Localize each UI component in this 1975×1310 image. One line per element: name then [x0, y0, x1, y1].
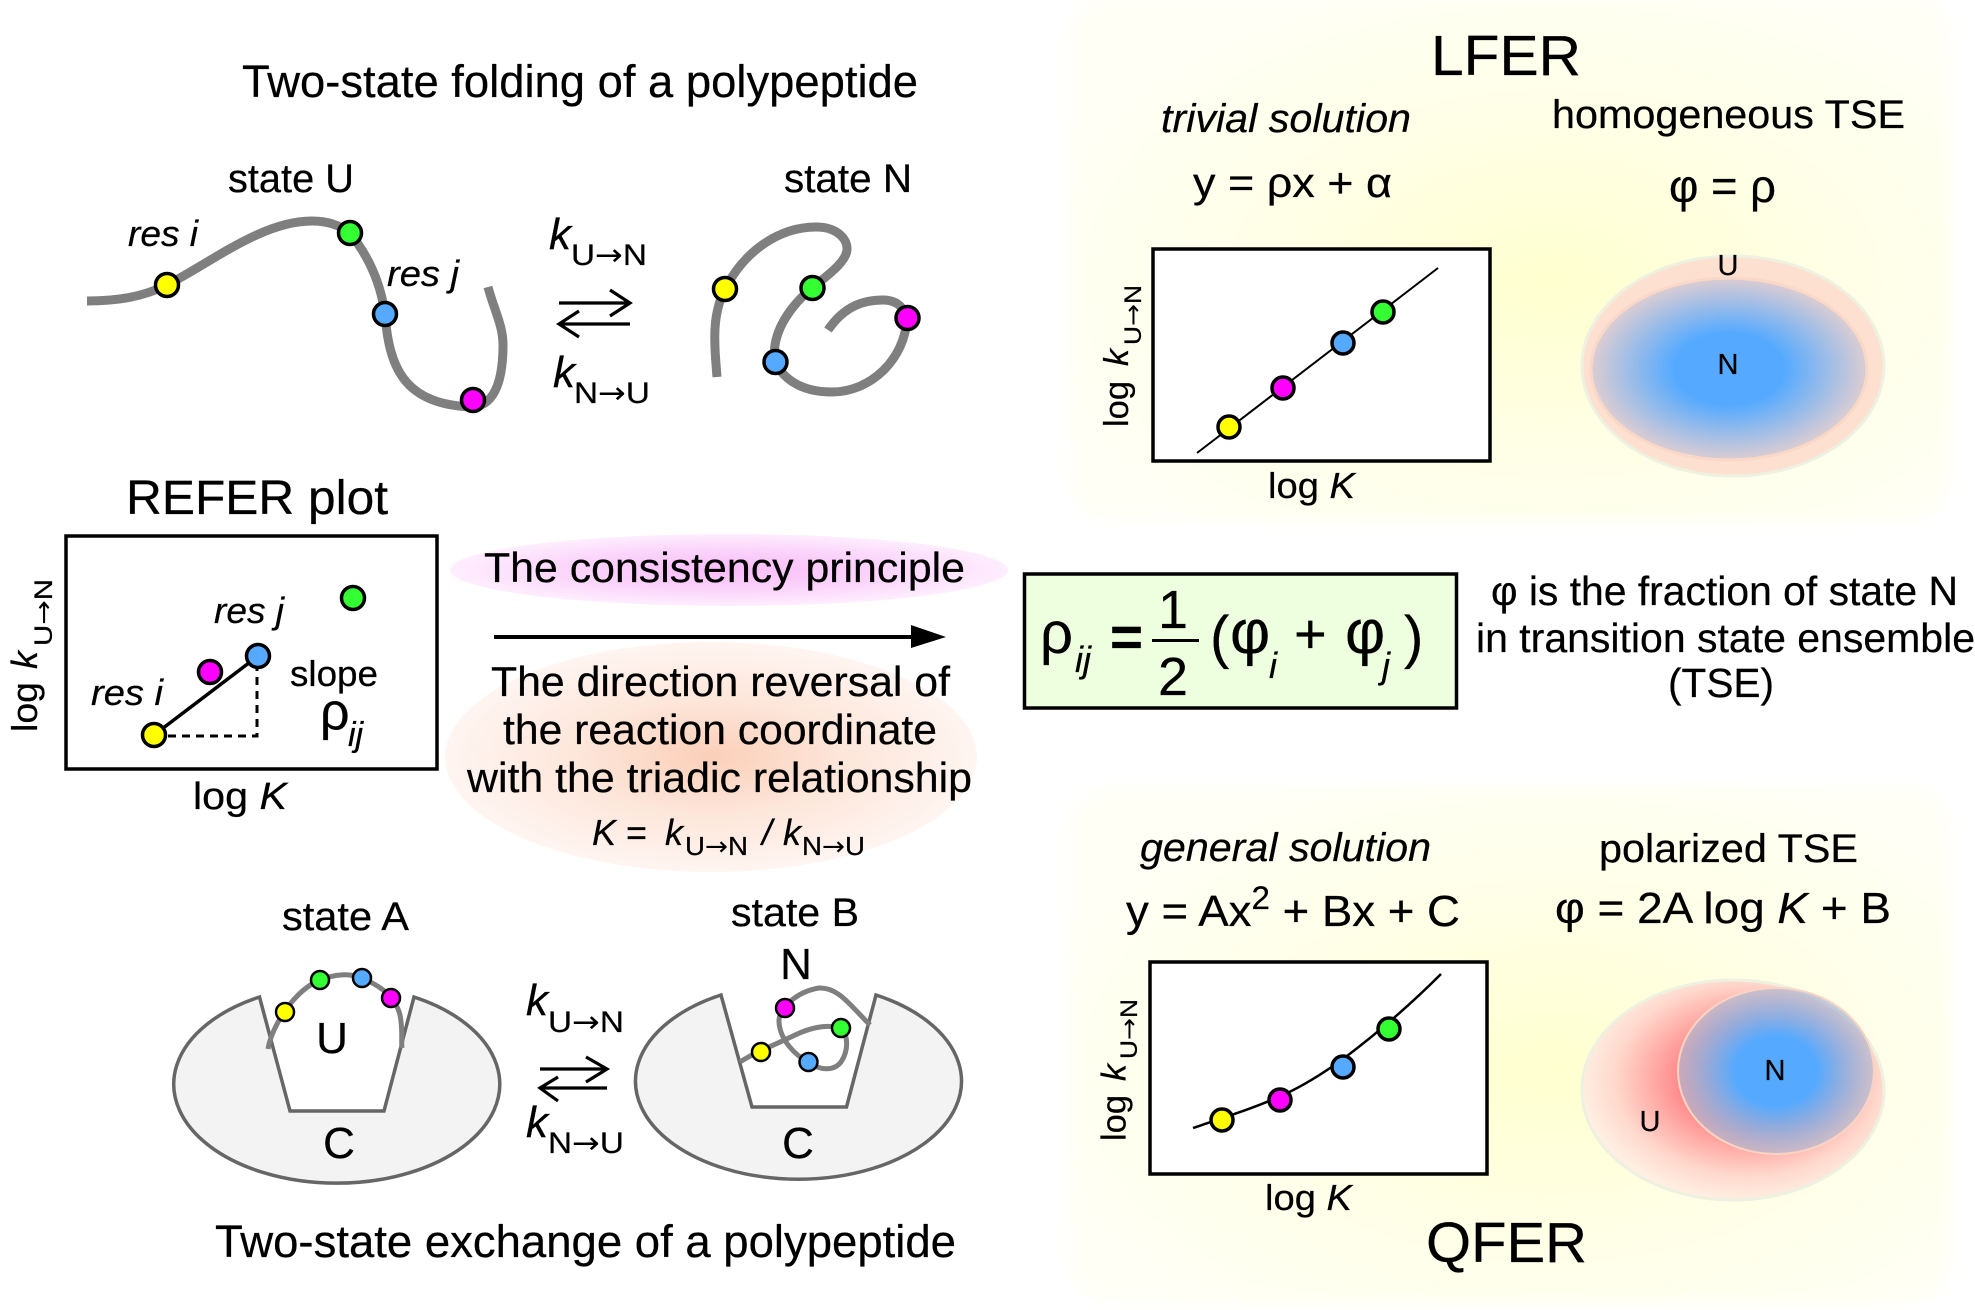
diagram: state A: [174, 969, 500, 1183]
residue: yellow: [156, 274, 178, 296]
label: C: C: [782, 1119, 814, 1168]
title: two-state folding: Two-state folding of a polypeptide: [242, 56, 918, 107]
equation box: rho ij: 1: [1158, 580, 1188, 640]
residue: green: [338, 222, 362, 244]
text: phi definition: φ is the fraction of state N: [1491, 568, 1958, 614]
text: phi definition: in transition state ensemble: [1476, 615, 1975, 661]
point: yellow: [1218, 416, 1240, 438]
axis label: LFER y: log: [1098, 381, 1136, 427]
rate constant: k N to U: k: [553, 348, 577, 397]
axis label: REFER y: k: [4, 649, 45, 669]
axis label: QFER y: log: [1096, 1095, 1134, 1141]
point: green: [342, 586, 364, 610]
residue: blue: [764, 350, 787, 374]
point: magenta: [1269, 1089, 1291, 1111]
label: res i: res i: [91, 672, 164, 713]
label: C: C: [323, 1119, 355, 1168]
equation box: rho ij: ): [1404, 605, 1423, 670]
residue: yellow: [752, 1043, 770, 1061]
arrow: exchange equilibrium: [540, 1057, 607, 1101]
label: N: N: [1718, 349, 1738, 381]
axis label: QFER x: log K: [1265, 1177, 1354, 1218]
panel: QFER background: [1070, 788, 1950, 1302]
label: N: N: [780, 940, 812, 989]
callout: direction reversal: [445, 642, 977, 872]
equation: LFER linear: y = ρx + α: [1193, 159, 1392, 206]
equation: QFER quadratic: 2: [1251, 880, 1270, 916]
label: U: U: [316, 1014, 348, 1063]
equation: QFER quadratic: y = Ax: [1126, 887, 1247, 936]
equation: phi equals rho: φ = ρ: [1669, 160, 1776, 212]
label: state A: state A: [282, 895, 409, 939]
point: yellow: [142, 724, 166, 746]
diagram: unfolded polypeptide: [87, 221, 503, 412]
chart: QFER plot: [1150, 962, 1487, 1174]
axis label: REFER y: [4, 579, 58, 732]
equation box: rho ij: ij: [1075, 639, 1092, 680]
axis label: LFER x: log K: [1268, 465, 1357, 506]
equation box: rho ij: =: [1110, 605, 1143, 668]
text: direction reversal: [466, 658, 972, 801]
title: two-state exchange: Two-state exchange of a polypeptide: [215, 1216, 956, 1267]
residue: yellow: [276, 1003, 294, 1021]
residue: green: [311, 971, 329, 989]
label: state U: state U: [228, 157, 354, 201]
rate constant: k U to N: k: [526, 976, 550, 1025]
label: rho ij: ρ: [320, 683, 350, 741]
callout: consistency principle: The consistency principle: [484, 544, 965, 591]
point: green: [1372, 301, 1394, 323]
heading: QFER: QFER: [1426, 1211, 1587, 1275]
label: homogeneous TSE: homogeneous TSE: [1552, 93, 1905, 137]
equation box: rho ij: j: [1377, 645, 1391, 686]
point: blue: [1332, 332, 1354, 354]
label: general solution: general solution: [1140, 826, 1431, 870]
equation box: rho ij: [1024, 574, 1456, 708]
equation: K definition: /: [759, 812, 776, 853]
point: magenta: [198, 660, 222, 684]
heading: LFER: LFER: [1431, 24, 1581, 88]
text: phi definition: (TSE): [1668, 660, 1774, 706]
label: state N: state N: [784, 157, 912, 201]
residue: yellow: [714, 278, 736, 300]
label: res i: res i: [128, 213, 199, 254]
heading: REFER plot: REFER plot: [126, 472, 388, 525]
axis label: LFER y: [1098, 285, 1147, 427]
diagram: homogeneous TSE: [1582, 250, 1884, 476]
residue: blue: [374, 302, 396, 326]
residue: green: [801, 276, 824, 300]
residue: green: [832, 1019, 850, 1037]
text: direction reversal: The direction reversal of: [491, 658, 950, 705]
rate constant: k U to N: [526, 976, 624, 1040]
equation box: rho ij: 2: [1158, 647, 1188, 707]
axis label: REFER y: log: [4, 682, 45, 732]
residue: magenta: [776, 999, 794, 1017]
rate constant: k U to N: U→N: [571, 238, 647, 273]
label: slope: slope: [290, 653, 378, 694]
axis label: REFER y: U→N: [29, 579, 58, 646]
label: U: U: [1640, 1106, 1660, 1138]
label: res j: res j: [214, 590, 285, 631]
equation: phi polarized: φ = 2A log K + B: [1555, 884, 1891, 933]
equation: K definition: k: [783, 812, 803, 853]
rate constant: k N to U: N→U: [574, 376, 650, 411]
rate constant: k N to U: [553, 348, 650, 411]
equation box: rho ij: φ: [1345, 598, 1385, 667]
equation box: rho ij: φ: [1230, 598, 1270, 667]
label: polarized TSE: polarized TSE: [1599, 827, 1858, 871]
equation: K definition: =: [626, 812, 647, 853]
label: N: N: [1765, 1055, 1785, 1087]
equation: K definition: [592, 812, 865, 862]
arrow: reaction coordinate: [494, 625, 946, 648]
equation: K definition: U→N: [685, 831, 748, 862]
axis label: QFER y: k: [1096, 1062, 1134, 1081]
axis label: REFER x: log K: [193, 776, 289, 818]
axis label: LFER y: k: [1098, 347, 1136, 366]
point: yellow: [1211, 1109, 1233, 1131]
point: green: [1378, 1018, 1400, 1040]
label: trivial solution: trivial solution: [1161, 97, 1411, 141]
equation: K definition: N→U: [802, 831, 865, 862]
point: blue: [246, 644, 270, 668]
point: magenta: [1272, 377, 1294, 399]
diagram: polarized TSE: [1582, 980, 1884, 1200]
arrow: folding equilibrium: [559, 290, 630, 337]
residue: magenta: [896, 306, 919, 330]
label: rho ij: ij: [348, 716, 365, 754]
chart: LFER plot: [1153, 249, 1490, 461]
axis label: QFER y: [1096, 999, 1143, 1141]
residue: blue: [800, 1053, 818, 1071]
residue: magenta: [462, 388, 484, 412]
equation: K definition: K: [592, 812, 618, 853]
equation box: rho ij: (: [1210, 605, 1229, 670]
rate constant: k N to U: [526, 1098, 624, 1161]
residue: magenta: [382, 989, 400, 1007]
equation box: rho ij: i: [1269, 645, 1278, 686]
chart: REFER plot: [66, 536, 437, 769]
callout: consistency principle: [450, 534, 1008, 606]
residue: blue: [353, 969, 371, 987]
diagram: state B: [635, 940, 962, 1179]
text: direction reversal: with the triadic relationship: [466, 754, 972, 801]
axis label: QFER y: U→N: [1115, 999, 1143, 1059]
rate constant: k U to N: U→N: [548, 1005, 624, 1040]
panel: LFER background: [1070, 0, 1950, 520]
diagram: folded polypeptide: [714, 227, 919, 392]
equation box: rho ij: +: [1294, 602, 1327, 665]
text: direction reversal: the reaction coordinate: [503, 706, 937, 753]
rate constant: k U to N: k: [549, 210, 573, 259]
rate constant: k U to N: [549, 210, 647, 273]
rate constant: k N to U: N→U: [548, 1126, 624, 1161]
label: rho ij: [320, 683, 365, 754]
axis label: LFER y: U→N: [1119, 285, 1147, 345]
text: phi definition: [1476, 568, 1975, 706]
label: res j: res j: [387, 253, 460, 294]
equation: QFER quadratic: + Bx + C: [1270, 887, 1460, 936]
label: state B: state B: [731, 891, 859, 935]
point: blue: [1332, 1056, 1354, 1078]
equation box: rho ij: ρ: [1040, 601, 1073, 666]
label: U: U: [1718, 250, 1738, 282]
rate constant: k N to U: k: [526, 1098, 550, 1147]
equation: K definition: k: [665, 812, 685, 853]
